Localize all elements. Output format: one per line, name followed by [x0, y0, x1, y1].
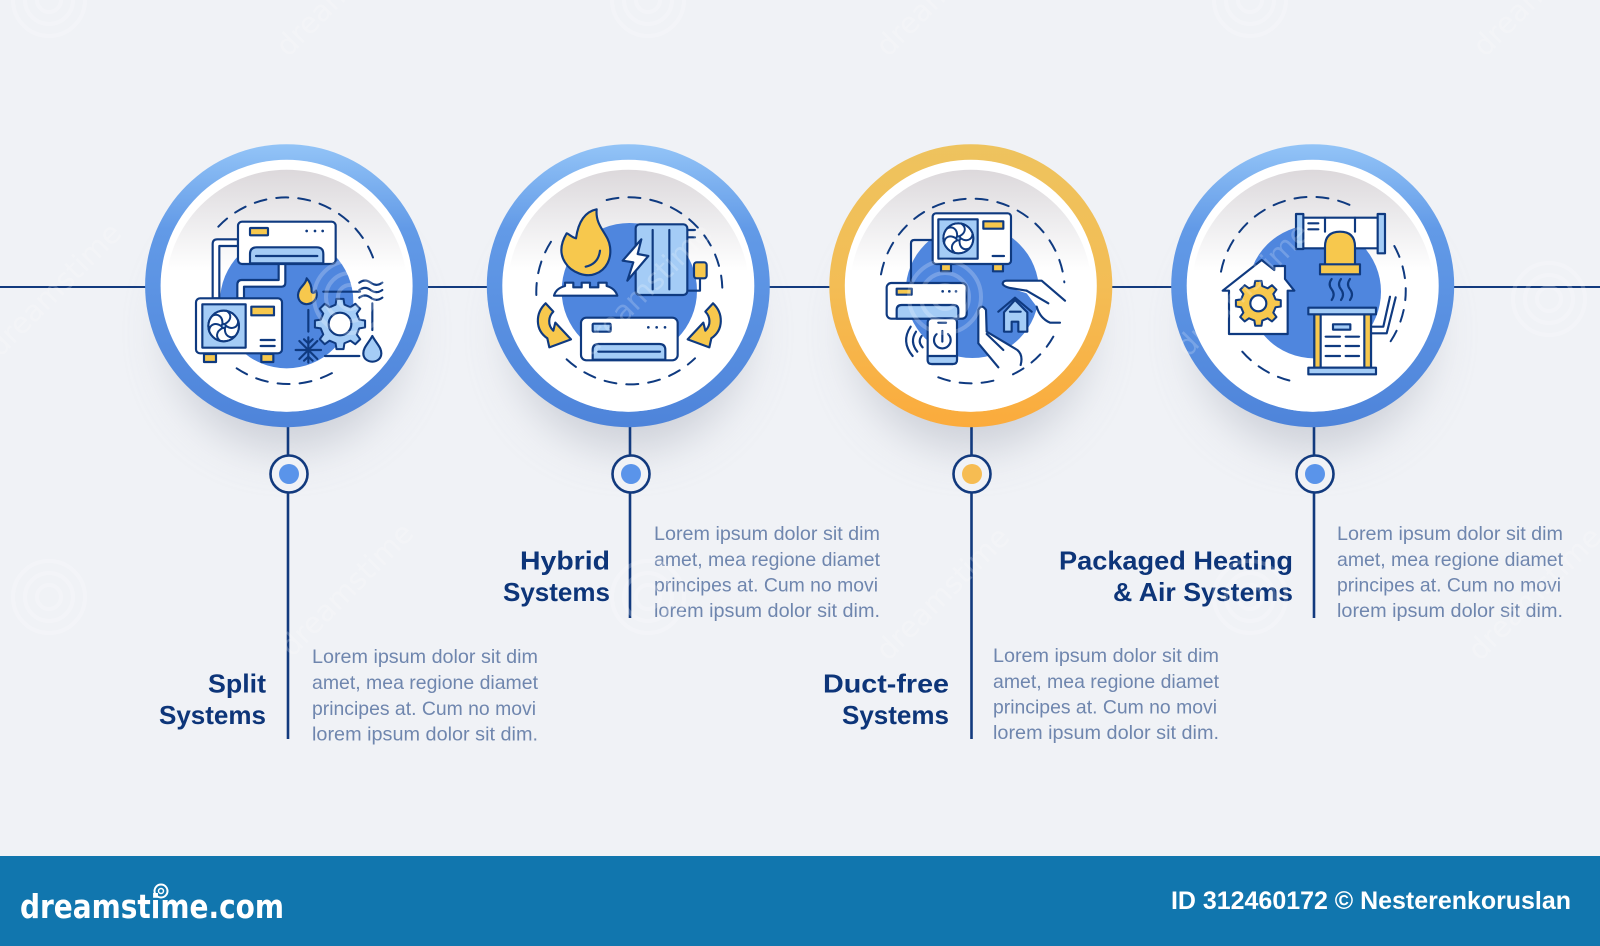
icon: remote controlled air conditioner [881, 199, 1065, 383]
heading: split systems [159, 668, 266, 730]
text block: split systems description: Lorem ipsum dolor sit dim [312, 646, 538, 668]
node marker: split systems [270, 456, 308, 492]
node marker: hybrid systems [612, 456, 650, 492]
text block: duct-free systems description: Lorem ipsum dolor sit dim [993, 645, 1219, 667]
heading: packaged heating and air systems: & Air Systems [1113, 577, 1293, 607]
text block: split systems description: lorem ipsum dolor sit dim. [312, 724, 538, 746]
icon: flame, radiator and air conditioner [536, 197, 722, 384]
text block: duct-free systems description: lorem ipsum dolor sit dim. [993, 722, 1219, 744]
text block: packaged heating and air systems description: Lorem ipsum dolor sit dim [1337, 523, 1563, 545]
text block: hybrid systems description: lorem ipsum dolor sit dim. [654, 600, 880, 622]
text block: split systems description [312, 646, 539, 746]
horizontal timeline line [0, 286, 1600, 288]
text block: hybrid systems description: principes at. Cum no movi [654, 574, 878, 596]
watermark overlay: dreamstime [273, 516, 420, 663]
panel: hybrid systems circle [487, 144, 770, 618]
heading: duct-free systems [823, 668, 949, 730]
heading: packaged heating and air systems: Packaged Heating [1059, 546, 1293, 576]
text block: split systems description: amet, mea regione diamet [312, 672, 539, 694]
text block: hybrid systems description [654, 523, 881, 622]
node marker: packaged heating and air systems [1296, 456, 1334, 492]
heading: split systems: Split [208, 668, 266, 698]
panel: split systems circle [145, 144, 428, 739]
watermark overlay [0, 0, 1600, 667]
heading: duct-free systems: Systems [842, 700, 949, 730]
text block: split systems description: principes at. Cum no movi [312, 698, 536, 720]
text block: packaged heating and air systems description: lorem ipsum dolor sit dim. [1337, 600, 1563, 622]
heading: duct-free systems: Duct-free [823, 668, 949, 698]
footer logo: dreamstime.com [20, 887, 284, 926]
text block: packaged heating and air systems description: principes at. Cum no movi [1337, 574, 1561, 596]
text block: packaged heating and air systems description: amet, mea regione diamet [1337, 549, 1564, 571]
panel: duct-free systems circle [829, 144, 1112, 739]
heading: split systems: Systems [159, 700, 266, 730]
heading: hybrid systems: Hybrid [520, 546, 610, 576]
heading: hybrid systems: Systems [503, 577, 610, 607]
text block: hybrid systems description: Lorem ipsum dolor sit dim [654, 523, 880, 545]
panel: packaged heating and air systems circle [1171, 144, 1454, 618]
text block: duct-free systems description [993, 645, 1220, 744]
heading: packaged heating and air systems [1059, 546, 1293, 607]
node marker: duct-free systems [954, 456, 990, 492]
text block: duct-free systems description: amet, mea regione diamet [993, 671, 1220, 693]
watermark overlay: dreamstime [1169, 216, 1316, 363]
footer credit: ID 312460172 © Nesterenkoruslan [1171, 887, 1571, 915]
text block: packaged heating and air systems description [1337, 523, 1564, 622]
footer bar [0, 856, 1600, 946]
text block: duct-free systems description: principes at. Cum no movi [993, 696, 1217, 718]
watermark overlay: dreamstime [571, 216, 718, 363]
icon: split air conditioner with gear [196, 197, 382, 384]
icon: house with gear, duct and heater [1221, 197, 1406, 382]
watermark overlay: dreamstime [869, 520, 1016, 667]
text block: hybrid systems description: amet, mea regione diamet [654, 549, 881, 571]
heading: hybrid systems [503, 546, 610, 607]
